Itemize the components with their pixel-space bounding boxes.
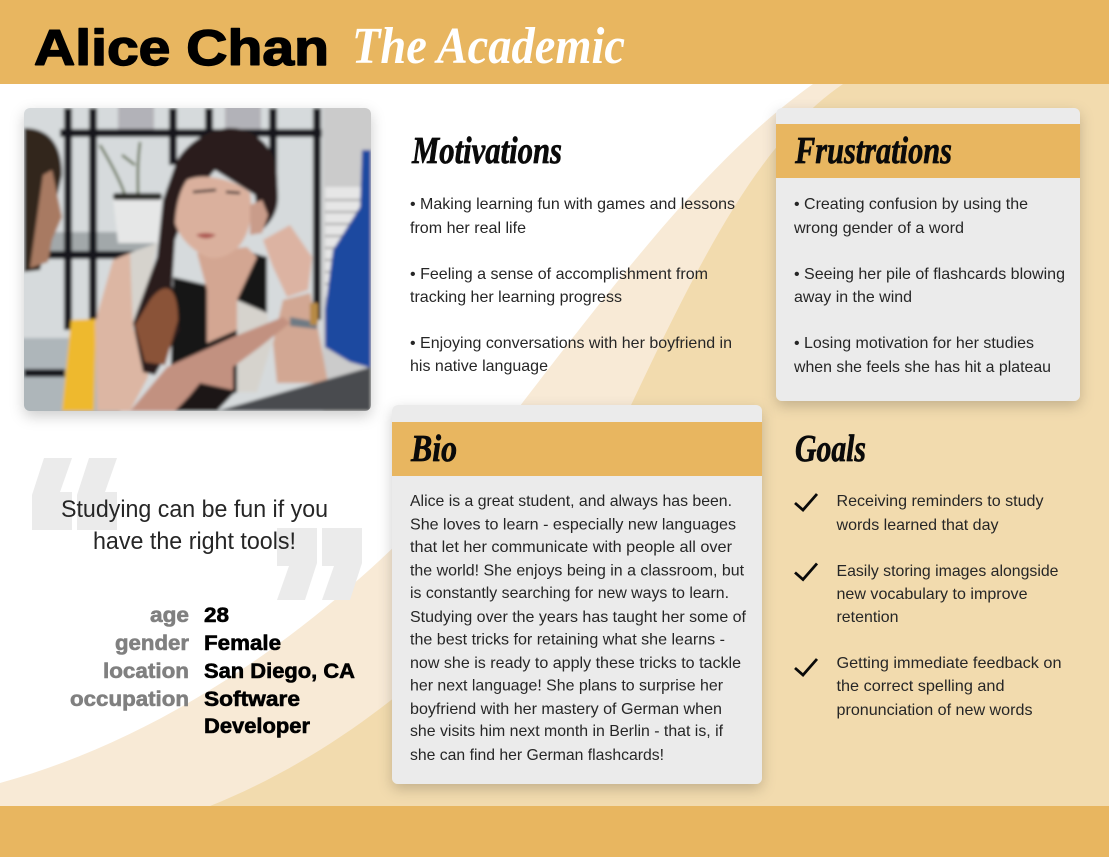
icon: check 1 bbox=[795, 494, 817, 510]
gender bbox=[115, 632, 281, 655]
occupation: Software bbox=[204, 688, 300, 711]
gender: Female bbox=[204, 632, 281, 655]
icon: check 3 bbox=[795, 659, 817, 675]
photo of Alice bbox=[20, 104, 375, 415]
goal 2: new vocabulary to improve bbox=[836, 586, 1028, 603]
age: 28 bbox=[204, 604, 229, 627]
frustrations list: away in the wind bbox=[794, 289, 912, 306]
bio text: is constantly searching for new ways to learn. bbox=[410, 585, 729, 602]
persona type: The Academic bbox=[352, 18, 625, 75]
motivations list: from her real life bbox=[410, 220, 526, 237]
bio text: Alice is a great student, and always has been. bbox=[410, 493, 732, 510]
quote text: Studying can be fun if you bbox=[61, 496, 328, 523]
bio text: Studying over the years has taught her some of bbox=[410, 609, 747, 626]
occupation: occupation bbox=[70, 688, 189, 711]
heading band bbox=[392, 422, 762, 476]
location: location bbox=[103, 660, 189, 683]
header band bbox=[0, 0, 1109, 84]
icon: opening quotation mark bbox=[32, 458, 117, 530]
backdrop bbox=[18, 106, 324, 419]
bio text: her next language! She plans to surprise her bbox=[410, 678, 724, 694]
bio text: now she is ready to apply these tricks to tackle bbox=[410, 655, 741, 672]
goal 1: words learned that day bbox=[835, 517, 998, 534]
panel: frustrations bbox=[776, 108, 1080, 401]
heading band bbox=[776, 124, 1080, 178]
panel: bio bbox=[392, 405, 762, 784]
goal 2: Easily storing images alongside bbox=[836, 563, 1059, 580]
goal 3: pronunciation of new words bbox=[836, 702, 1032, 719]
frustrations list: • Seeing her pile of flashcards blowing bbox=[794, 266, 1065, 283]
card background bbox=[392, 405, 762, 784]
icon: closing quotation mark bbox=[277, 528, 362, 600]
motivations list: • Feeling a sense of accomplishment from bbox=[410, 266, 708, 283]
location: San Diego, CA bbox=[204, 660, 355, 683]
goal 2: retention bbox=[836, 609, 898, 626]
bio text: that let her communicate with people all over bbox=[410, 539, 733, 556]
demographics bbox=[70, 604, 355, 738]
heading: bio: Bio bbox=[410, 428, 457, 470]
occupation: Developer bbox=[204, 715, 310, 738]
frustrations list: • Creating confusion by using the bbox=[794, 196, 1028, 213]
age bbox=[150, 604, 229, 627]
gender: gender bbox=[115, 632, 189, 655]
motivations list: • Enjoying conversations with her boyfriend in bbox=[410, 335, 732, 352]
title bbox=[34, 18, 625, 76]
quote text: have the right tools! bbox=[93, 528, 296, 555]
bio text: she visits him next month in Berlin - that is, if bbox=[410, 723, 724, 740]
quote bbox=[32, 458, 362, 600]
motivations list: his native language bbox=[410, 358, 548, 375]
goal 3: Getting immediate feedback on bbox=[836, 655, 1062, 672]
frustrations list: • Losing motivation for her studies bbox=[794, 335, 1034, 352]
heading: frustrations: Frustrations bbox=[794, 130, 952, 172]
card background bbox=[776, 108, 1080, 401]
bio text: she can find her German flashcards! bbox=[410, 747, 664, 764]
motivations list: tracking her learning progress bbox=[410, 289, 622, 306]
bio text: boyfriend with her mastery of German when bbox=[410, 701, 722, 718]
heading: goals: Goals bbox=[795, 428, 866, 470]
goal 1: Receiving reminders to study bbox=[836, 493, 1044, 510]
panel: goals bbox=[795, 428, 1062, 719]
occupation bbox=[70, 688, 310, 738]
panel: motivations bbox=[410, 130, 735, 375]
location bbox=[103, 660, 355, 683]
icon: check 2 bbox=[795, 564, 817, 580]
frustrations list: when she feels she has hit a plateau bbox=[793, 359, 1051, 376]
name: Alice Chan bbox=[34, 20, 329, 76]
goal 3: the correct spelling and bbox=[836, 678, 1004, 695]
bio text: the best tricks for retaining what she learns - bbox=[410, 632, 725, 648]
footer band bbox=[0, 806, 1109, 857]
bio text: She loves to learn - especially new languages bbox=[410, 516, 736, 534]
motivations list: • Making learning fun with games and lessons bbox=[410, 196, 735, 213]
bio text: the world! She enjoys being in a classroom, but bbox=[410, 562, 745, 580]
age: age bbox=[150, 604, 189, 627]
frustrations list: wrong gender of a word bbox=[793, 220, 964, 237]
heading: motivations: Motivations bbox=[411, 130, 562, 172]
